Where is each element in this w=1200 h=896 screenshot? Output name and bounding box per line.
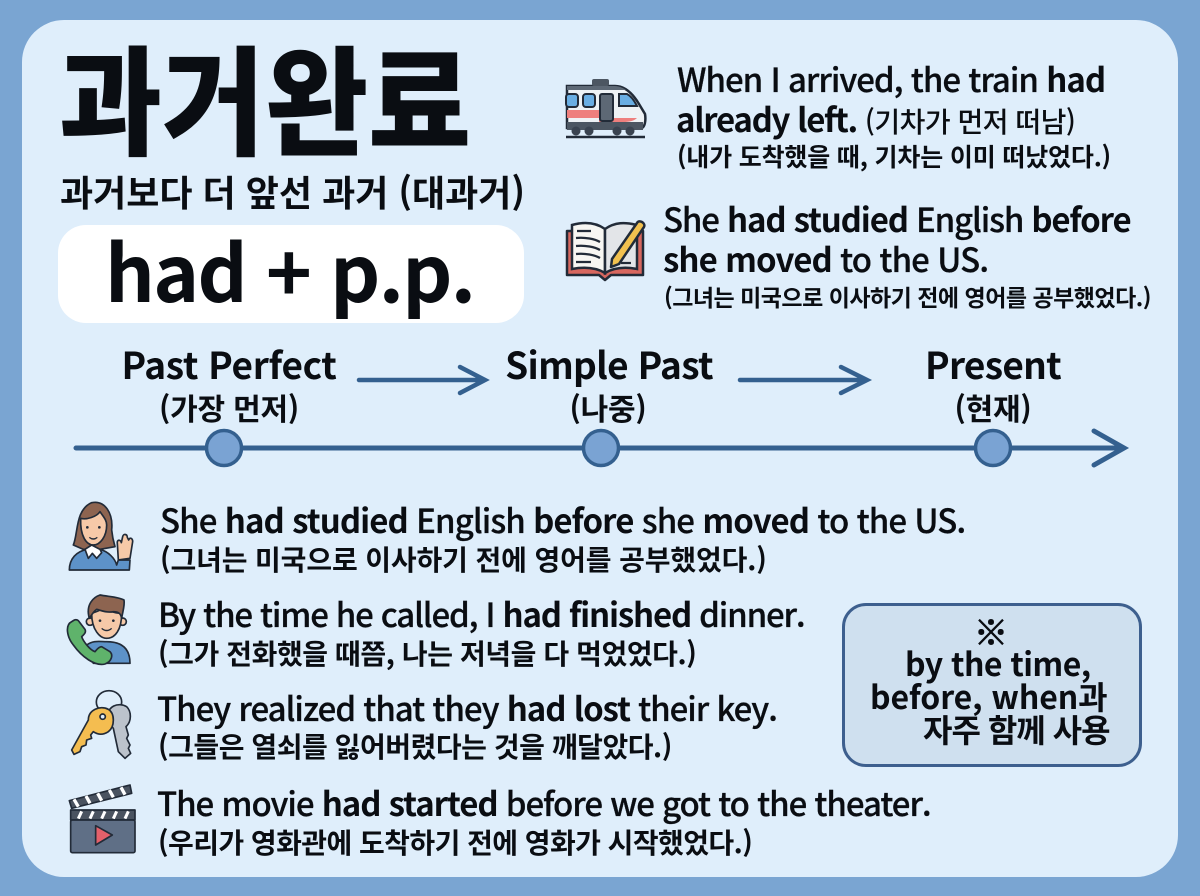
row 2 english: By the time he called, I had finished dinner. [158,589,805,637]
row 3 english: They realized that they had lost their key. [157,683,777,731]
timeline sublabel: first: (가장 먼저) [159,385,299,429]
icon: train [565,79,647,138]
formula pill [58,225,524,323]
row 4 korean: (우리가 영화관에 도착하기 전에 영화가 시작했었다.) [158,822,752,862]
timeline label: present: Present [925,336,1061,390]
row 1 english: She had studied English before she moved to the US. [160,495,965,543]
subtitle: 과거보다 더 앞선 과거 (대과거) [60,165,525,217]
line: train korean: (내가 도착했을 때, 기차는 이미 떠났었다.) [677,138,1111,174]
line: study korean: (그녀는 미국으로 이사하기 전에 영어를 공부했었다.) [664,279,1151,313]
icon: keys [70,690,132,760]
callout box [842,603,1142,767]
timeline label: simple past: Simple Past [505,336,713,390]
line: train english 2: already left. (기차가 먼저 떠남) [676,94,1075,142]
arrow: simple past to present [738,364,872,396]
timeline axis [74,428,1129,468]
row 2 korean: (그가 전화했을 때쯤, 나는 저녁을 다 먹었었다.) [158,633,696,673]
icon: clapperboard [68,784,136,854]
line: study english 1: She had studied English before [663,194,1130,242]
formula text: had + p.p. [105,213,474,325]
icon: woman waving [68,502,134,571]
line: train english 1: When I arrived, the train had [677,54,1105,102]
arrow: past perfect to simple past [356,364,490,396]
icon: open book and pencil [566,220,646,282]
timeline sublabel: now: (현재) [954,385,1032,429]
row 3 korean: (그들은 열쇠를 잃어버렸다는 것을 깨달았다.) [158,726,672,766]
title: 과거완료 [59,10,471,181]
timeline label: past perfect: Past Perfect [121,336,337,390]
icon: man on phone [66,594,131,666]
callout mark: ※ [974,606,1008,655]
timeline sublabel: later: (나중) [569,385,647,429]
callout line 1: by the time, [905,640,1091,686]
row 1 korean: (그녀는 미국으로 이사하기 전에 영어를 공부했었다.) [160,539,767,579]
line: study english 2: she moved to the US. [663,234,988,282]
callout line 2: before, when과 [870,673,1108,719]
callout line 3: 자주 함께 사용 [923,706,1110,752]
row 4 english: The movie had started before we got to the theater. [157,778,931,826]
